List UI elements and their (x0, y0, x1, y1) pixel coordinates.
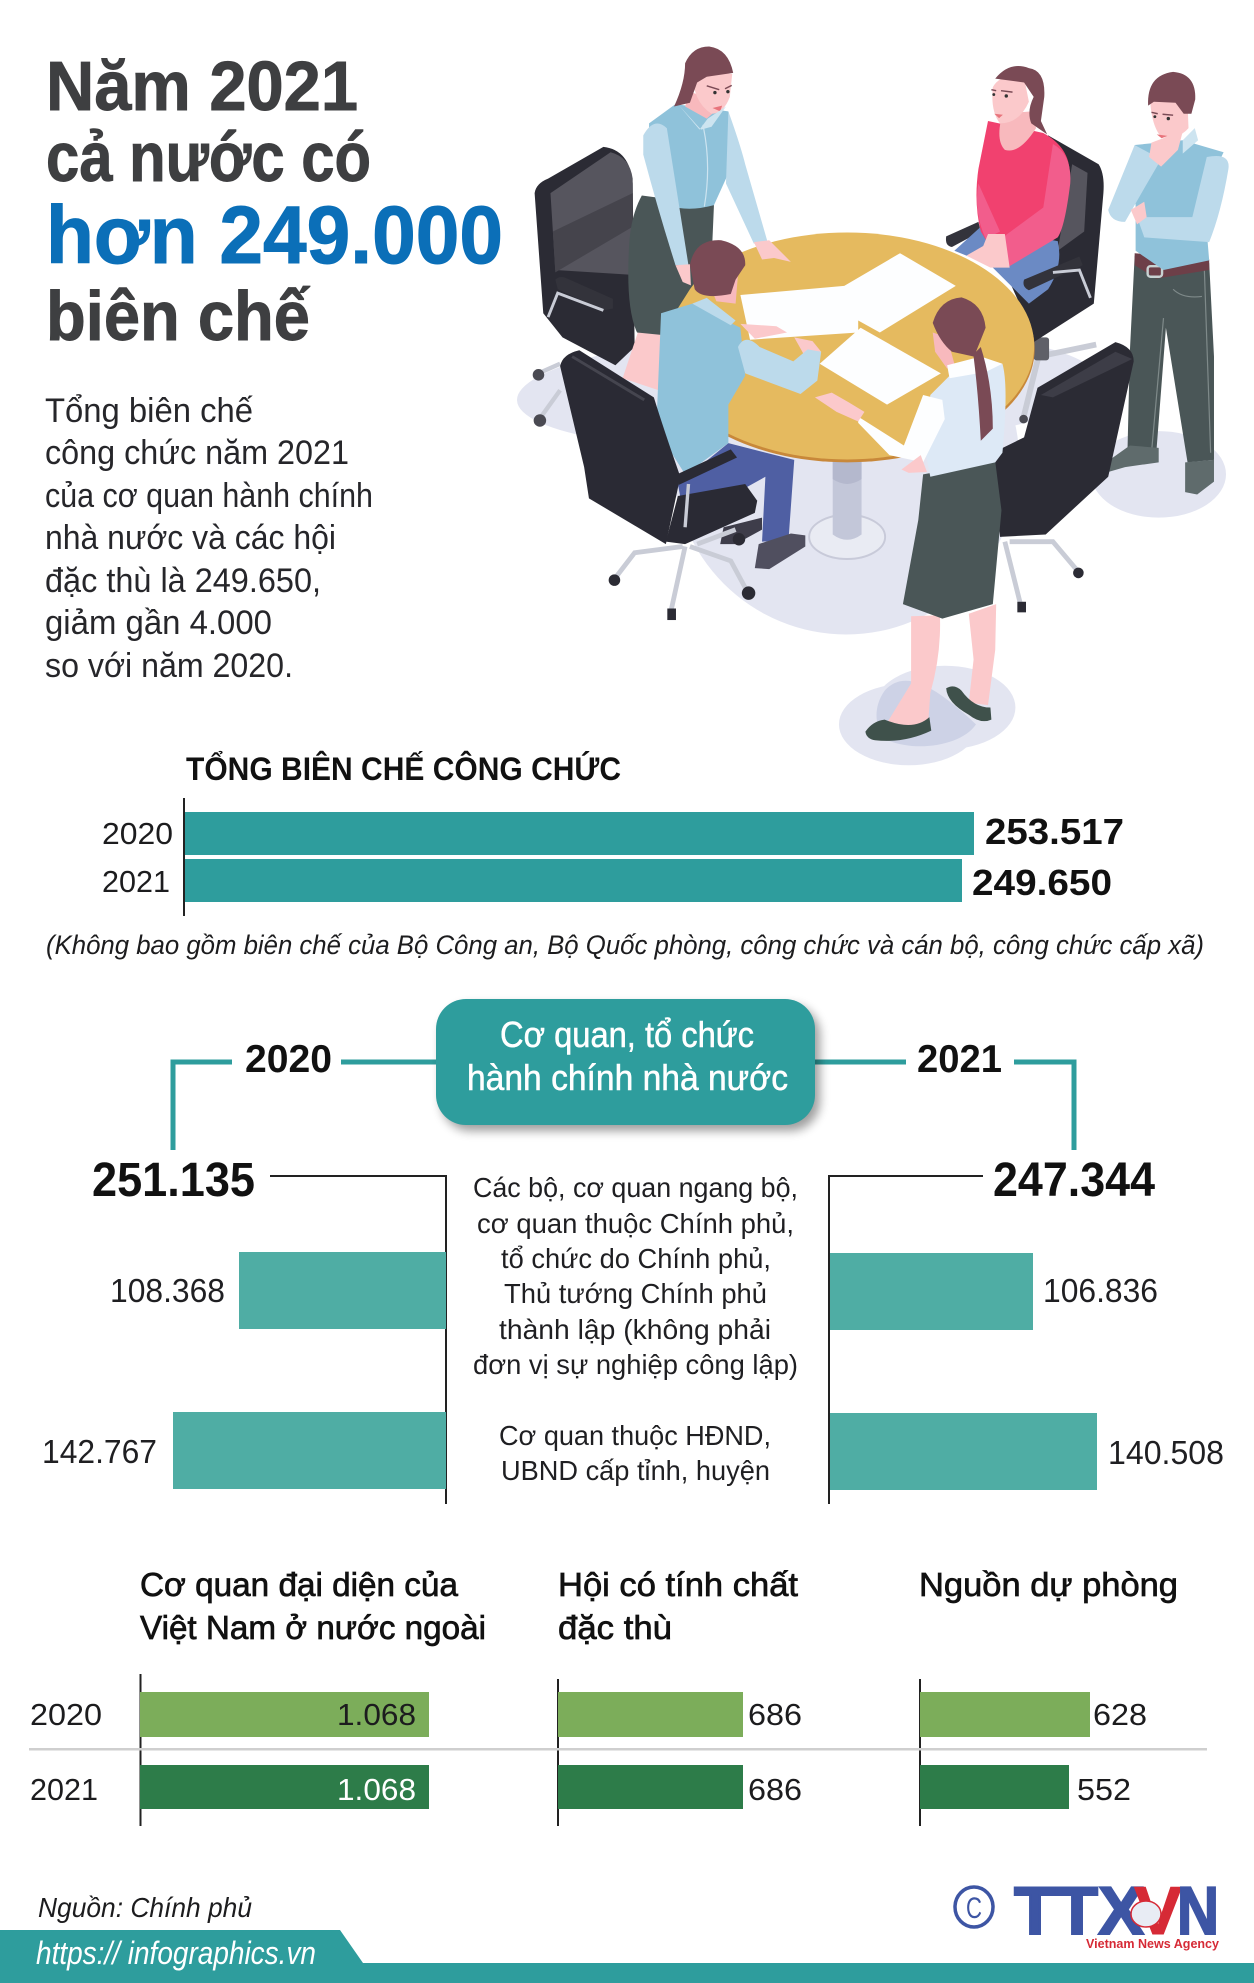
bottom charts (29, 1674, 1207, 1826)
title (46, 47, 503, 355)
central description: ministries: đơn vị sự nghiệp công lập) (473, 1349, 798, 1380)
chart: associations: 686 (748, 1772, 802, 1807)
chair: back right (946, 135, 1104, 423)
bottom charts: 2020 (30, 1697, 102, 1732)
source: Nguồn: Chính phủ (38, 1892, 252, 1923)
callout: state administrative agencies (436, 999, 820, 1131)
note: (Không bao gồm biên chế của Bộ Công an, Bộ Quốc phòng, công chức và cán bộ, công chức cấp xã) (46, 930, 1204, 960)
heading: reserve: Nguồn dự phòng (919, 1566, 1178, 1603)
central description: ministries: Thủ tướng Chính phủ (504, 1278, 767, 1309)
intro paragraph: Tổng biên chế (45, 392, 253, 430)
heading: overseas representative agencies (140, 1566, 486, 1646)
intro paragraph: so với năm 2020. (45, 647, 293, 685)
chart: associations: 686 (748, 1697, 802, 1732)
intro paragraph: đặc thù là 249.650, (45, 562, 321, 600)
table top (660, 233, 1035, 462)
logo: TTXVN: Vietnam News Agency (1086, 1936, 1220, 1951)
logo: TTXVN (955, 1873, 1220, 1951)
chart: reserve (920, 1692, 1147, 1809)
bar 2020 (185, 812, 974, 855)
callout: state administrative agencies: hành chính nhà nước (467, 1057, 788, 1098)
chair: back left (533, 147, 635, 427)
central description: ministries: cơ quan thuộc Chính phủ, (477, 1208, 794, 1239)
title: Năm 2021 (46, 47, 358, 125)
intro paragraph: của cơ quan hành chính (45, 477, 373, 515)
central description: ministries: Các bộ, cơ quan ngang bộ, (473, 1172, 798, 1203)
chair: front left (560, 350, 757, 620)
bar chart: total: 2021 (102, 864, 170, 899)
central description: ministries: thành lập (không phải (499, 1314, 771, 1345)
callout: state administrative agencies: Cơ quan, tổ chức (500, 1014, 754, 1055)
intro paragraph: giảm gần 4.000 (45, 604, 272, 642)
chart: overseas agencies: 1.068 (337, 1697, 416, 1732)
heading: overseas representative agencies: Việt Nam ở nước ngoài (140, 1609, 486, 1646)
title: biên chế (46, 277, 310, 355)
logo: TTXVN: N (1177, 1873, 1219, 1949)
chart: 2021 agencies: 140.508 (1108, 1434, 1224, 1471)
bar chart: total: 253.517 (985, 811, 1124, 852)
chart: associations (558, 1692, 802, 1809)
chart: 2021 agencies (829, 1154, 1224, 1504)
person: seated man in vest (656, 240, 821, 569)
person: standing woman front (815, 297, 1006, 741)
connector lines (173, 1062, 1074, 1150)
chart: 2020 agencies: 142.767 (42, 1433, 157, 1470)
heading: special associations: đặc thù (558, 1609, 672, 1646)
floor shadows (515, 288, 1226, 765)
year label 2020: 2020 (245, 1038, 332, 1081)
illustration: meeting around a table (515, 46, 1229, 765)
central description: local agencies (499, 1420, 771, 1486)
chart: reserve: 628 (1093, 1697, 1147, 1732)
logo: TTXVN: TTX (1014, 1873, 1144, 1949)
table leg (809, 458, 885, 559)
bar chart: total: 2020 (102, 816, 173, 851)
heading: total civil servants: TỔNG BIÊN CHẾ CÔNG CHỨC (186, 751, 621, 787)
central description: ministries (473, 1172, 798, 1380)
intro paragraph: nhà nước và các hội (45, 519, 336, 557)
title: cả nước có (46, 118, 371, 196)
footer band: https:// infographics.vn (36, 1935, 316, 1971)
heading: special associations: Hội có tính chất (558, 1566, 798, 1603)
chart: 2020 agencies: 251.135 (92, 1154, 255, 1207)
bottom charts: 2021 (30, 1772, 98, 1807)
heading: overseas representative agencies: Cơ quan đại diện của (140, 1566, 459, 1603)
chair: front right (993, 342, 1134, 612)
central description: local agencies: Cơ quan thuộc HĐND, (499, 1420, 771, 1451)
person: standing man right (1108, 72, 1229, 495)
central description: local agencies: UBND cấp tỉnh, huyện (501, 1455, 770, 1486)
bar 2021 (185, 859, 962, 902)
chart: 2021 agencies: 247.344 (993, 1154, 1155, 1207)
chart: 2020 agencies (42, 1154, 446, 1504)
chart: 2021 agencies: 106.836 (1043, 1272, 1158, 1309)
person: seated woman in pink (954, 66, 1090, 304)
heading: special associations (558, 1566, 798, 1646)
person: standing woman left (623, 46, 791, 390)
intro paragraph: công chức năm 2021 (45, 434, 349, 472)
chart: reserve: 552 (1077, 1772, 1131, 1807)
bar chart: total (102, 798, 1124, 916)
intro paragraph (45, 392, 373, 685)
bar chart: total: 249.650 (972, 862, 1112, 903)
footer band (0, 1930, 1254, 1983)
documents on the table (740, 253, 956, 405)
title: hơn 249.000 (46, 190, 503, 281)
chart: overseas agencies (140, 1692, 429, 1809)
chart: overseas agencies: 1.068 (337, 1772, 416, 1807)
chart: 2020 agencies: 108.368 (110, 1272, 225, 1309)
central description: ministries: tổ chức do Chính phủ, (501, 1243, 771, 1274)
year label 2021: 2021 (917, 1038, 1002, 1081)
logo: TTXVN: V (1134, 1873, 1182, 1949)
logo: TTXVN: C (966, 1892, 982, 1925)
